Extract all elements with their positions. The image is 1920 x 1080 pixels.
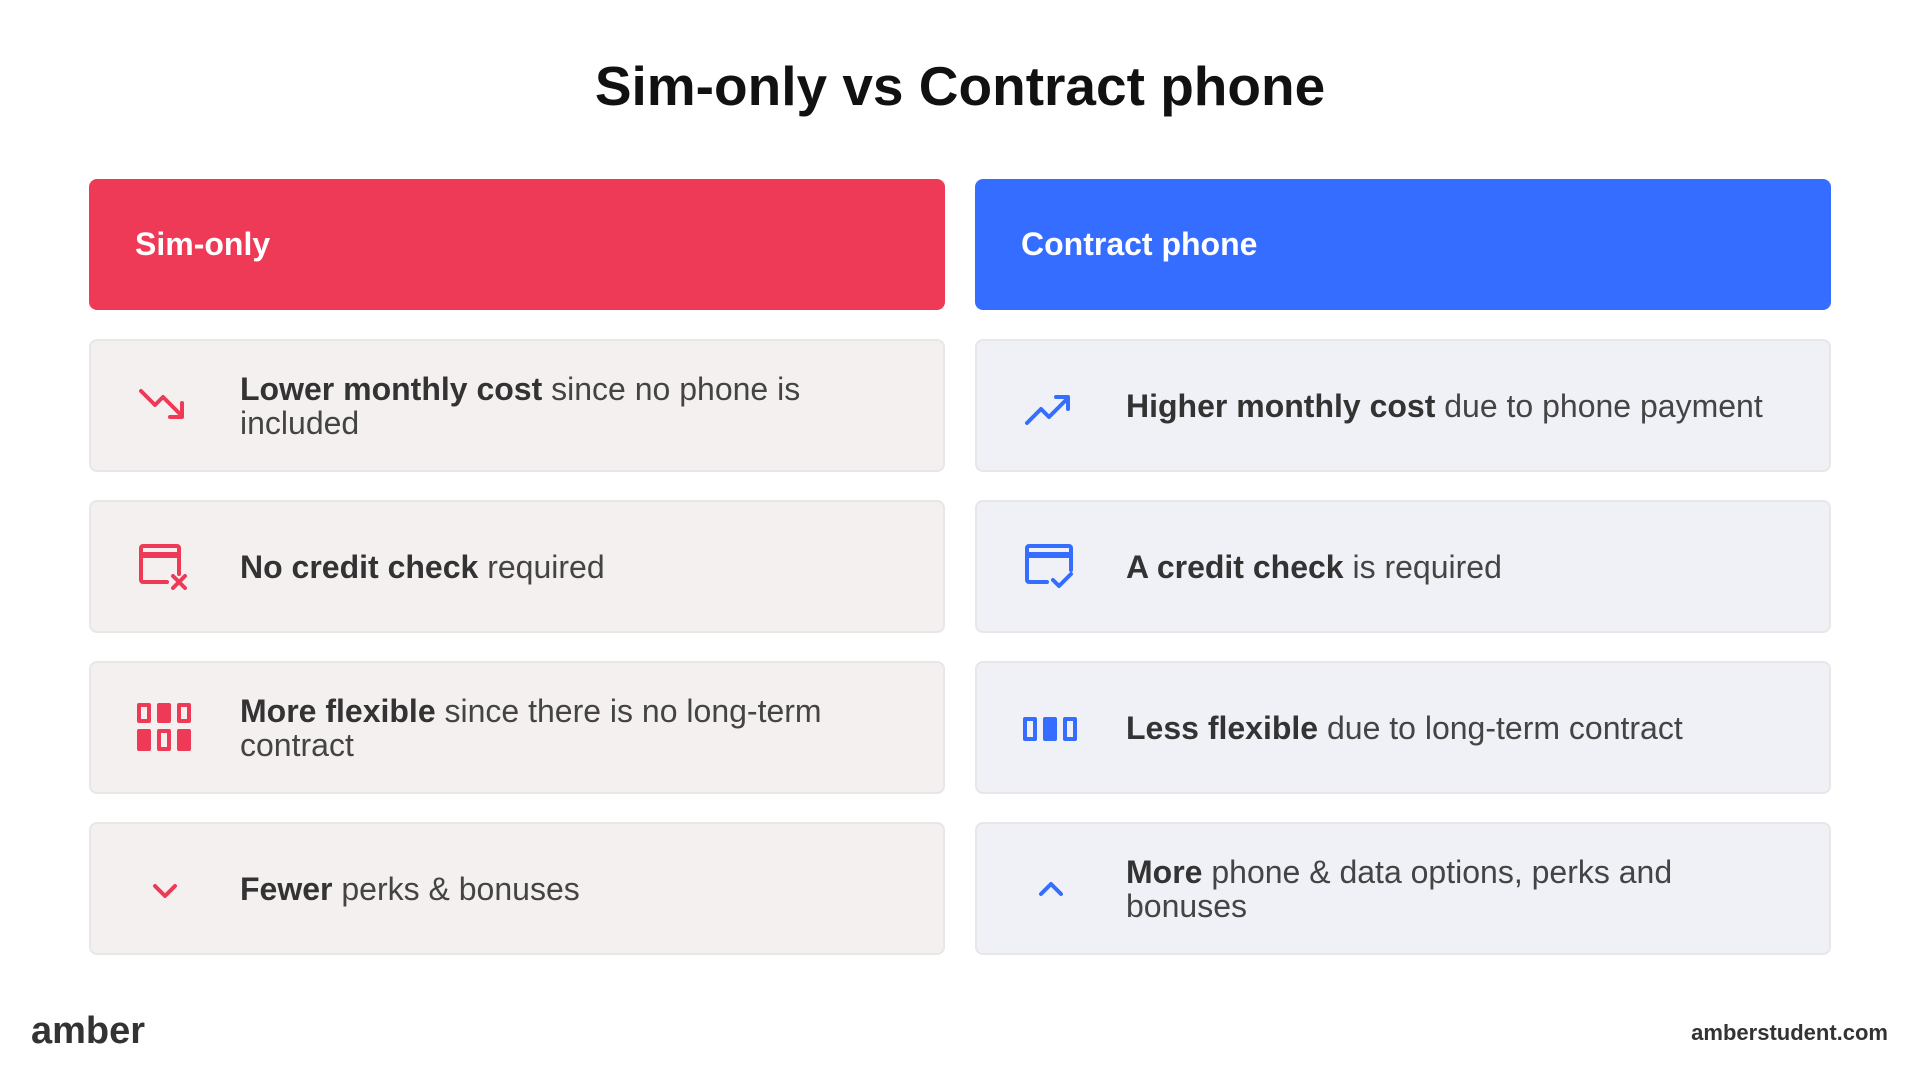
text: Less flexible due to long-term contract	[1126, 710, 1683, 746]
icon: trend down	[138, 388, 184, 419]
text: Lower monthly cost since no phone is included	[240, 370, 800, 440]
title: Sim-only vs Contract phone	[595, 55, 1325, 117]
text: More flexible since there is no long-term contract	[240, 692, 822, 762]
text: More phone & data options, perks and bonuses	[1126, 854, 1672, 924]
icon: card x	[139, 544, 188, 590]
header: sim-only: Sim-only	[135, 226, 270, 262]
card: lower monthly cost	[89, 339, 945, 472]
card: credit check required	[975, 500, 1831, 633]
icon: card check	[1025, 544, 1074, 588]
card: more flexible	[89, 661, 945, 794]
text: Fewer perks & bonuses	[240, 870, 580, 906]
icon: grid	[137, 703, 191, 751]
icon: chevron up	[1038, 882, 1064, 896]
icon: chevron down	[152, 884, 178, 898]
text: Higher monthly cost due to phone payment	[1126, 388, 1763, 424]
text: A credit check is required	[1126, 548, 1502, 584]
card: fewer perks	[89, 822, 945, 955]
text: No credit check required	[240, 548, 605, 584]
footer url: amberstudent.com	[1691, 1020, 1888, 1045]
header: sim-only	[89, 179, 945, 310]
header: contract phone: Contract phone	[1021, 226, 1257, 262]
logo: amber: amber	[31, 1010, 145, 1052]
card: no credit check	[89, 500, 945, 633]
card: more perks	[975, 822, 1831, 955]
card: less flexible	[975, 661, 1831, 794]
header: contract phone	[975, 179, 1831, 310]
icon: trend up	[1024, 395, 1070, 426]
icon: bars	[1023, 717, 1077, 741]
card: higher monthly cost	[975, 339, 1831, 472]
